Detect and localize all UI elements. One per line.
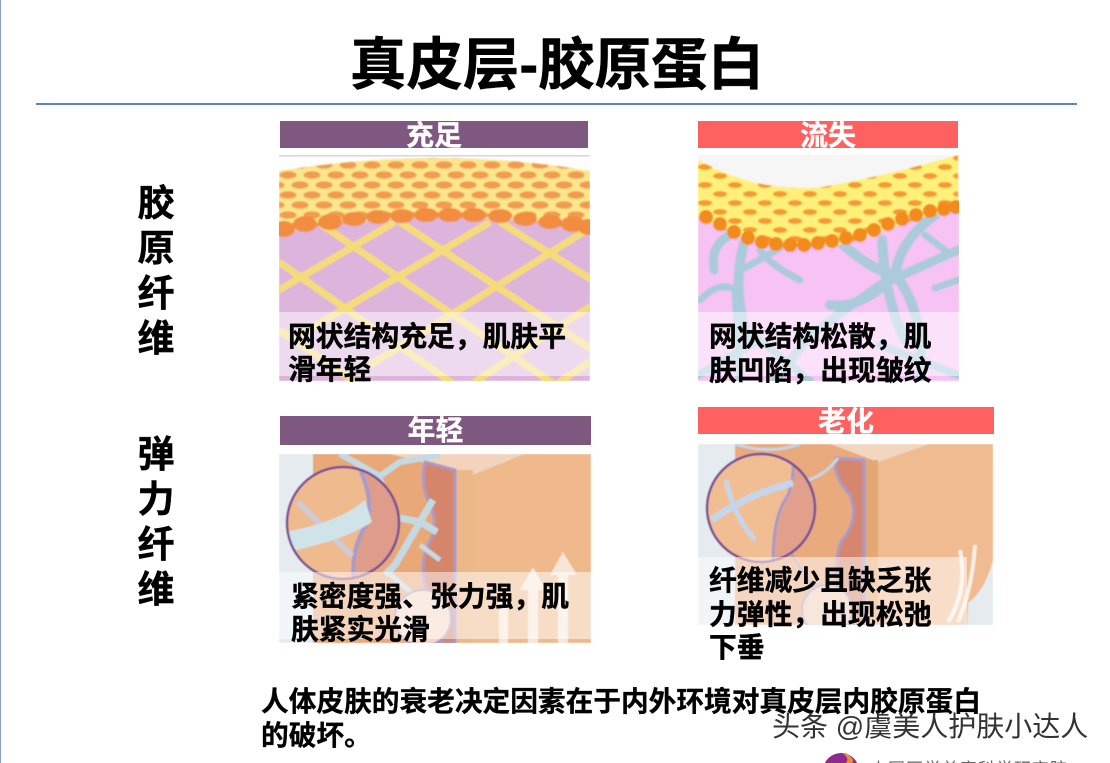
caption: 滑年轻 bbox=[288, 354, 371, 385]
caption bbox=[709, 565, 932, 663]
illustration: aged skin cross-section bbox=[698, 444, 993, 625]
illustration: dense collagen mesh bbox=[279, 155, 590, 381]
caption: 纤维减少且缺乏张 bbox=[709, 565, 931, 596]
panel: sufficient collagen bbox=[279, 120, 590, 385]
side label: collagen fibers: 胶 原 纤 维 bbox=[138, 183, 174, 359]
caption: 网状结构松散，肌 bbox=[709, 315, 931, 355]
heading: young bbox=[280, 416, 591, 445]
caption bbox=[709, 315, 932, 389]
panel: young elastic fibers bbox=[279, 415, 591, 645]
caption bbox=[291, 575, 569, 645]
caption: 力弹性，出现松弛 bbox=[709, 593, 931, 633]
heading: lost bbox=[698, 121, 958, 148]
icon: logo bbox=[824, 753, 858, 763]
heading: lost: 流失 bbox=[800, 120, 856, 151]
illustration: loose fibers bbox=[698, 155, 959, 381]
panel: lost collagen bbox=[698, 120, 959, 389]
caption bbox=[288, 315, 566, 385]
heading: sufficient bbox=[280, 121, 588, 148]
panel: aged elastic fibers bbox=[698, 406, 994, 663]
caption: 肤紧实光滑 bbox=[291, 614, 430, 645]
heading: young: 年轻 bbox=[407, 415, 464, 446]
summary text bbox=[261, 686, 981, 751]
caption: 网状结构充足，肌肤平 bbox=[288, 315, 566, 355]
illustration: young skin cross-section bbox=[279, 454, 591, 643]
side label: elastic fibers: 弹 力 纤 维 bbox=[138, 434, 174, 610]
summary text: 的破坏。 bbox=[261, 720, 372, 751]
watermark: 头条 @虞美人护肤小达人 bbox=[772, 711, 1088, 742]
caption: 肤凹陷，出现皱纹 bbox=[709, 349, 931, 389]
summary text: 人体皮肤的衰老决定因素在于内外环境对真皮层内胶原蛋白 bbox=[261, 686, 981, 717]
title: 真皮层-胶原蛋白 bbox=[350, 33, 764, 96]
heading: sufficient: 充足 bbox=[406, 120, 462, 151]
caption: 下垂 bbox=[709, 632, 765, 663]
heading: aged: 老化 bbox=[818, 406, 874, 437]
caption: 紧密度强、张力强，肌 bbox=[291, 575, 569, 615]
heading: aged bbox=[698, 407, 994, 434]
